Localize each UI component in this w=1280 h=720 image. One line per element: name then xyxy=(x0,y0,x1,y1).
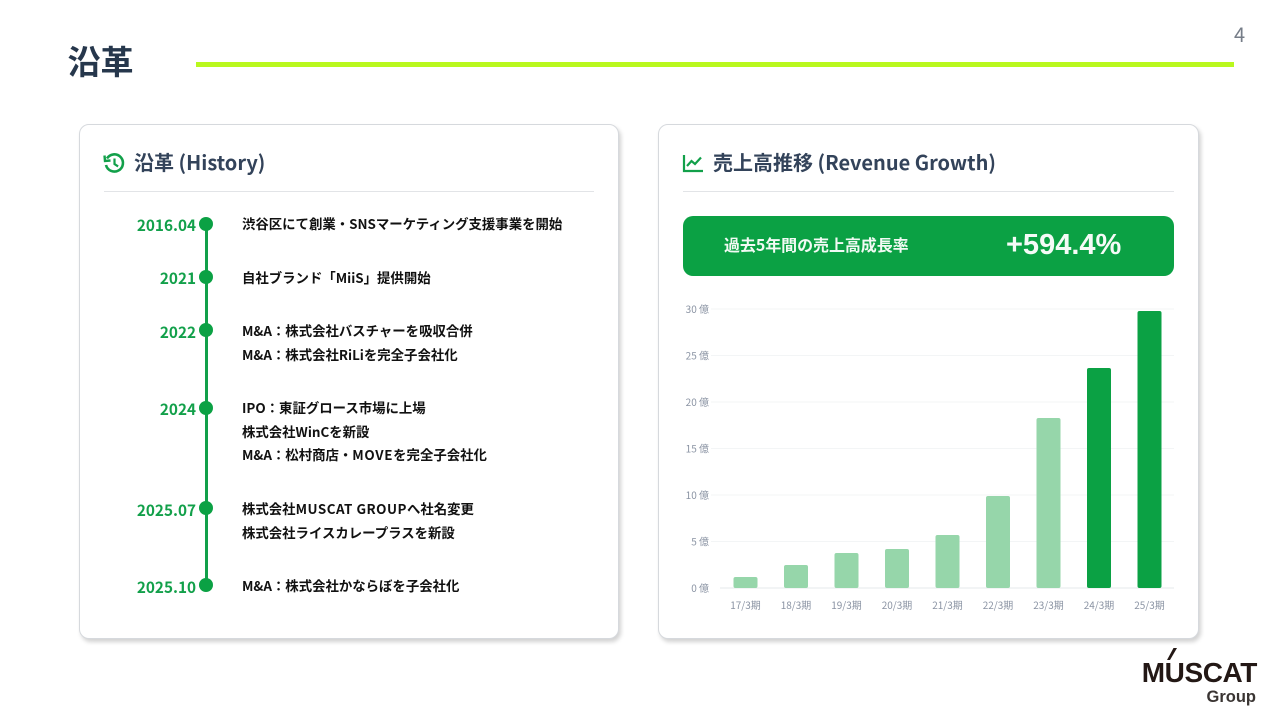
callout value: +594.4% xyxy=(1006,229,1121,261)
x axis labels: 20/3期 xyxy=(882,597,912,612)
date: 2025.07: 2025.07 xyxy=(137,499,196,521)
icon: line chart xyxy=(682,155,703,172)
title accent bar xyxy=(196,62,1234,67)
date: 2024: 2024 xyxy=(160,398,196,420)
event: 2024: 株式会社WinCを新設 xyxy=(242,421,369,441)
event: 2022 xyxy=(242,320,473,364)
timeline axis xyxy=(204,224,208,585)
date: 2016.04: 2016.04 xyxy=(137,214,196,236)
logo: MUSCAT Group xyxy=(1142,648,1258,706)
x axis labels: 25/3期 xyxy=(1134,597,1165,612)
timeline xyxy=(205,230,208,578)
panel: revenue growth xyxy=(658,124,1199,639)
y axis labels: 10 億 xyxy=(686,487,709,502)
y axis labels: 0 億 xyxy=(691,580,709,595)
date: 2025.10: 2025.10 xyxy=(137,576,196,598)
y axis labels: 25 億 xyxy=(686,348,709,362)
event: 2022: M&A：株式会社バスチャーを吸収合併 xyxy=(242,320,473,340)
event: 2024: IPO：東証グロース市場に上場 xyxy=(242,397,426,417)
x axis labels: 19/3期 xyxy=(831,597,862,612)
y axis labels: 15 億 xyxy=(686,440,709,456)
callout: growth rate xyxy=(683,216,1174,276)
bar chart xyxy=(686,301,1174,612)
bars xyxy=(734,311,1162,588)
logo accent xyxy=(1167,648,1177,660)
x axis labels: 17/3期 xyxy=(730,597,761,612)
logo wordmark: MUSCAT xyxy=(1142,657,1257,688)
date: 2022: 2022 xyxy=(160,321,196,343)
callout label: 過去5年間の売上高成長率 xyxy=(724,232,909,256)
heading: revenue growth: 売上高推移 (Revenue Growth) xyxy=(713,147,996,176)
heading: history: 沿革 (History) xyxy=(134,147,265,176)
event: 2022: M&A：株式会社RiLiを完全子会社化 xyxy=(242,344,458,364)
x axis labels: 21/3期 xyxy=(932,597,963,612)
x axis labels: 18/3期 xyxy=(781,597,811,612)
x axis labels: 22/3期 xyxy=(983,597,1013,612)
x axis labels xyxy=(730,597,1165,612)
y axis labels: 20 億 xyxy=(686,394,709,409)
event: 2025.07 xyxy=(242,498,474,542)
logo subtext: Group xyxy=(1206,688,1256,706)
event: 2016.04: 渋谷区にて創業・SNSマーケティング支援事業を開始 xyxy=(242,213,562,233)
event: 2025.10: M&A：株式会社かならぼを子会社化 xyxy=(242,575,459,595)
event: 2024: M&A：松村商店・MOVEを完全子会社化 xyxy=(242,444,487,464)
title: 沿革 xyxy=(68,36,134,84)
date: 2021: 2021 xyxy=(160,267,196,289)
y axis labels: 5 億 xyxy=(691,534,709,548)
x axis labels: 24/3期 xyxy=(1084,597,1114,612)
icon: history clock xyxy=(103,153,124,173)
event: 2021: 自社ブランド「MiiS」提供開始 xyxy=(242,267,431,287)
x axis labels: 23/3期 xyxy=(1033,597,1064,612)
y axis labels: 30 億 xyxy=(686,301,709,316)
event: 2025.07: 株式会社MUSCAT GROUPへ社名変更 xyxy=(242,498,474,518)
y axis labels xyxy=(686,301,709,595)
page number: 4 xyxy=(1234,19,1245,48)
panel: history xyxy=(79,124,619,639)
event: 2024 xyxy=(242,397,487,464)
event: 2025.07: 株式会社ライスカレープラスを新設 xyxy=(242,522,455,542)
